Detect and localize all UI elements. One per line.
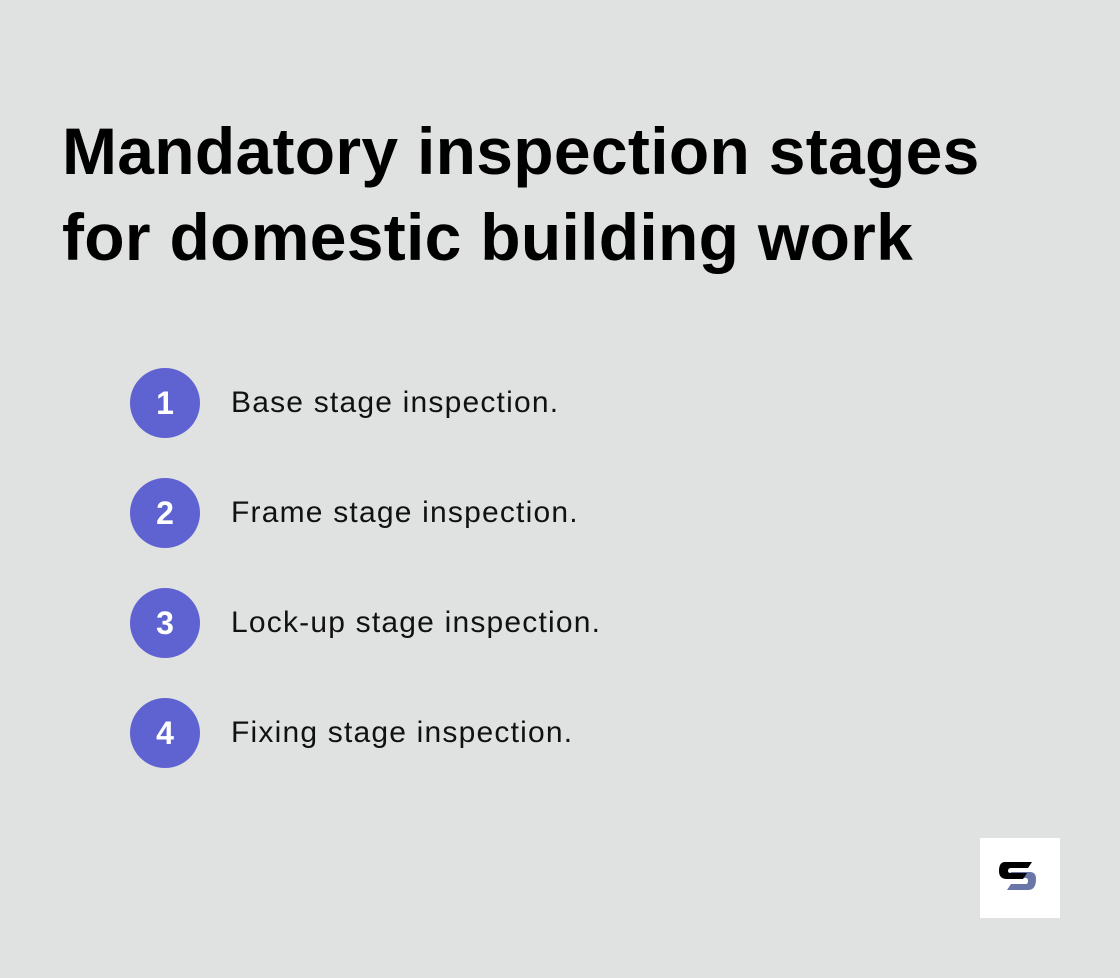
item 4: 4 xyxy=(156,715,174,751)
item 1 xyxy=(130,368,559,438)
item 2: 2 xyxy=(156,495,174,531)
item 4 xyxy=(130,698,573,768)
item 3: Lock-up stage inspection. xyxy=(231,606,601,639)
item 3: 3 xyxy=(156,605,174,641)
item 2 xyxy=(130,478,579,548)
item 2: Frame stage inspection. xyxy=(231,496,579,529)
item 1: 1 xyxy=(156,385,174,421)
logo xyxy=(980,838,1060,918)
item 3 xyxy=(130,588,601,658)
title: Mandatory inspection stages xyxy=(62,114,980,188)
item 4: Fixing stage inspection. xyxy=(231,716,573,749)
title: for domestic building work xyxy=(62,200,913,274)
title xyxy=(62,114,980,274)
item 1: Base stage inspection. xyxy=(231,386,559,419)
